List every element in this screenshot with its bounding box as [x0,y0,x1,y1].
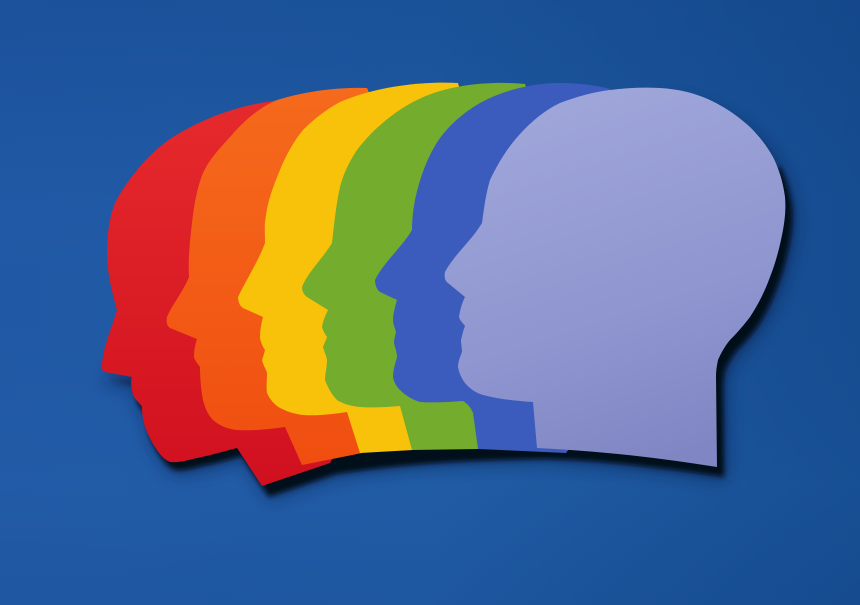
head: red [102,100,420,486]
wide soft shadow [108,102,795,500]
tight contact shadow [110,167,792,497]
head: lavender [445,88,785,467]
head: yellow [238,83,520,453]
head: blue [375,83,680,453]
head: green [302,83,600,450]
head: orange [167,88,460,465]
